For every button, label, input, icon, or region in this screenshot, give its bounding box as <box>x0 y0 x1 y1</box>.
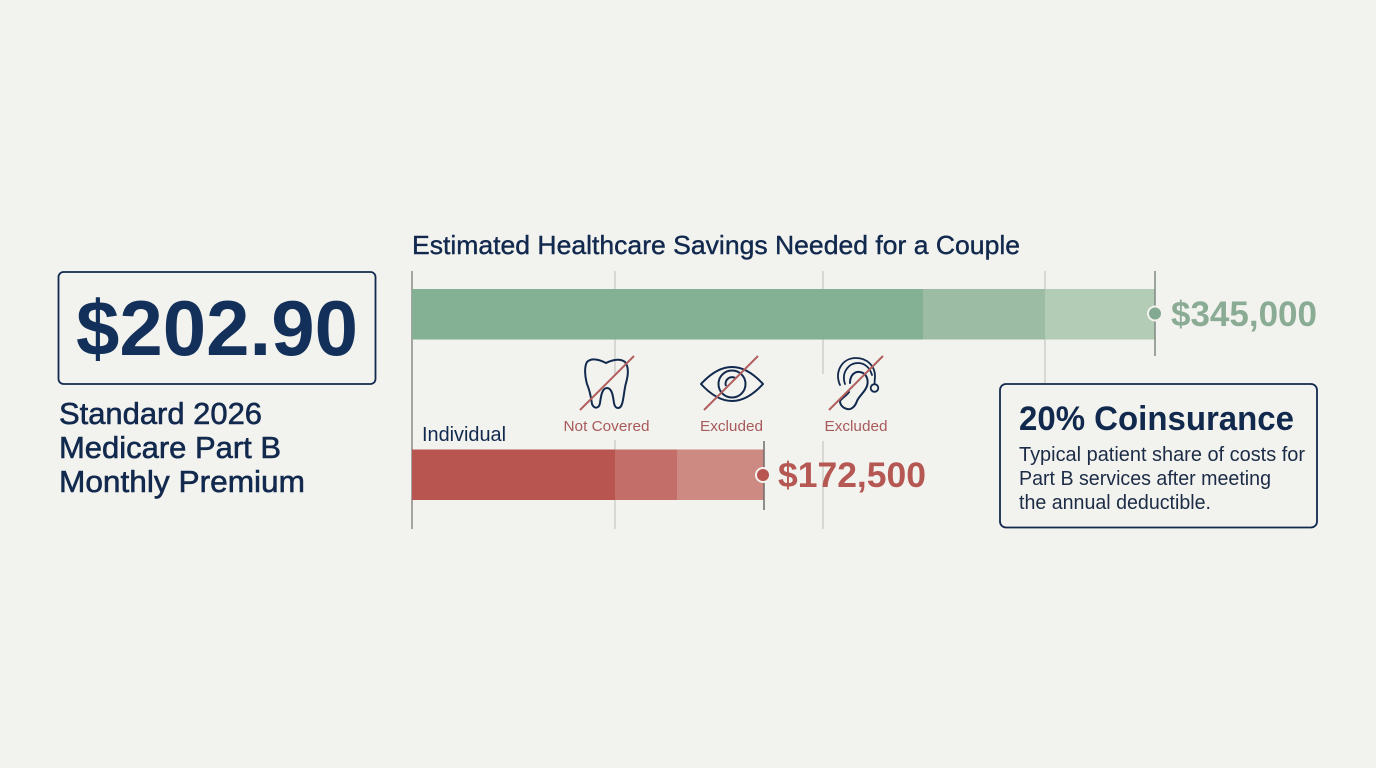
premium description: Medicare Part B <box>59 430 281 465</box>
callout body text <box>1019 444 1305 514</box>
icon: eye excluded: Excluded <box>700 418 763 435</box>
chart: healthcare savings <box>412 230 1317 529</box>
panel: monthly premium <box>58 272 376 499</box>
panel: coinsurance callout <box>1000 384 1317 528</box>
icon: ear excluded <box>824 356 888 435</box>
icon: eye excluded <box>700 356 763 435</box>
label: individual: Individual <box>422 424 506 446</box>
icon: tooth not covered: Not Covered <box>564 418 650 435</box>
callout body text: Typical patient share of costs for <box>1019 444 1305 466</box>
chart title: Estimated Healthcare Savings Needed for a Couple <box>412 230 1020 260</box>
icon: tooth not covered <box>564 356 650 435</box>
bar: individual $172,500: $172,500 <box>778 456 926 495</box>
premium value box: $202.90 <box>76 284 358 372</box>
callout heading: 20% Coinsurance <box>1019 400 1294 438</box>
bar: couple $345,000: $345,000 <box>1171 295 1317 334</box>
bar: couple $345,000 <box>412 271 1317 356</box>
premium description: Standard 2026 <box>59 396 262 431</box>
callout body text: Part B services after meeting <box>1019 468 1271 490</box>
callout body text: the annual deductible. <box>1019 492 1211 514</box>
bar: individual $172,500 <box>412 441 926 510</box>
premium description <box>59 396 305 499</box>
premium value box <box>58 272 376 384</box>
premium description: Monthly Premium <box>59 464 305 499</box>
icon: ear excluded: Excluded <box>824 418 888 435</box>
